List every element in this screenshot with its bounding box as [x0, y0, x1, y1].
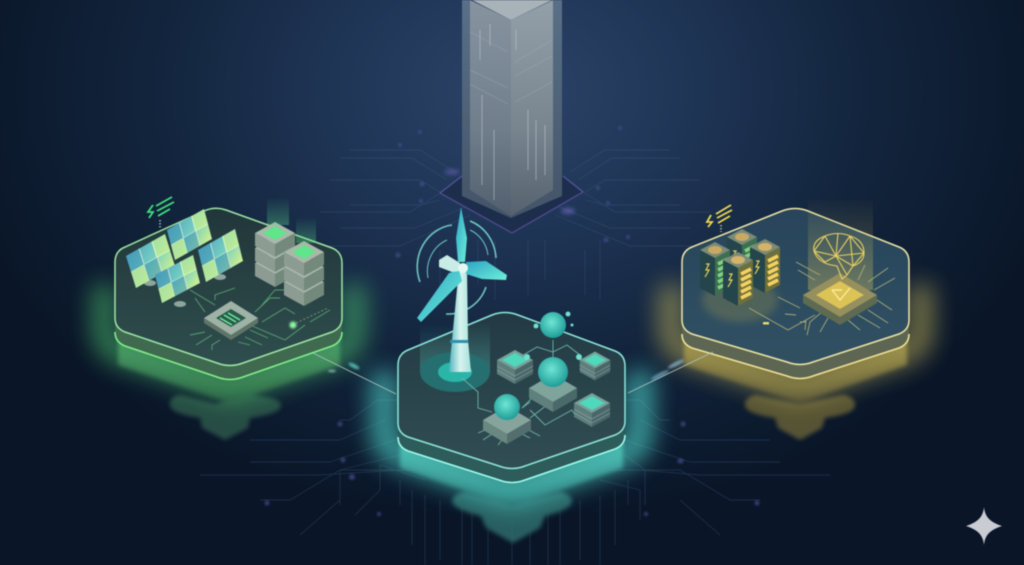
solar panels [126, 209, 243, 307]
icon: sparkle watermark [966, 507, 1002, 545]
panel: wind platform (teal) [384, 207, 640, 543]
circuit traces [462, 340, 580, 445]
yellow glow [671, 285, 921, 388]
turbine rotation arcs [417, 221, 496, 314]
panel: AI platform (yellow) [671, 200, 921, 440]
pillar: top data tower [462, 0, 562, 218]
AI chip [803, 273, 877, 325]
turbine base glow [420, 323, 490, 392]
platform top surface [398, 312, 625, 468]
platform side [682, 262, 909, 378]
node glow [290, 322, 296, 328]
AI brain network [814, 233, 864, 279]
panel: solar platform (green) [104, 197, 354, 440]
reflection below yellow platform [684, 335, 907, 440]
connector: wind to AI [628, 352, 713, 393]
circuit traces [190, 288, 330, 350]
chip [204, 301, 258, 340]
AI light beam [808, 200, 873, 290]
icon: energy bolt [148, 197, 174, 228]
platform top surface [115, 208, 342, 366]
teal glow [384, 372, 640, 492]
background circuit traces [200, 150, 830, 565]
reflection below green platform [118, 335, 340, 440]
green glow [104, 285, 354, 388]
node network [483, 312, 610, 444]
server stacks [255, 197, 324, 306]
circuit traces [749, 262, 895, 335]
wind turbine [417, 207, 507, 372]
reflection below teal platform [400, 440, 623, 543]
dark diamond base under pillar [440, 170, 583, 233]
pillar top face [472, 0, 552, 20]
battery racks [700, 229, 780, 322]
platform side [115, 262, 342, 380]
platform side [398, 365, 625, 482]
icon: energy bolt [707, 205, 732, 232]
connector: solar to wind [313, 353, 396, 394]
platform top surface [682, 208, 909, 364]
